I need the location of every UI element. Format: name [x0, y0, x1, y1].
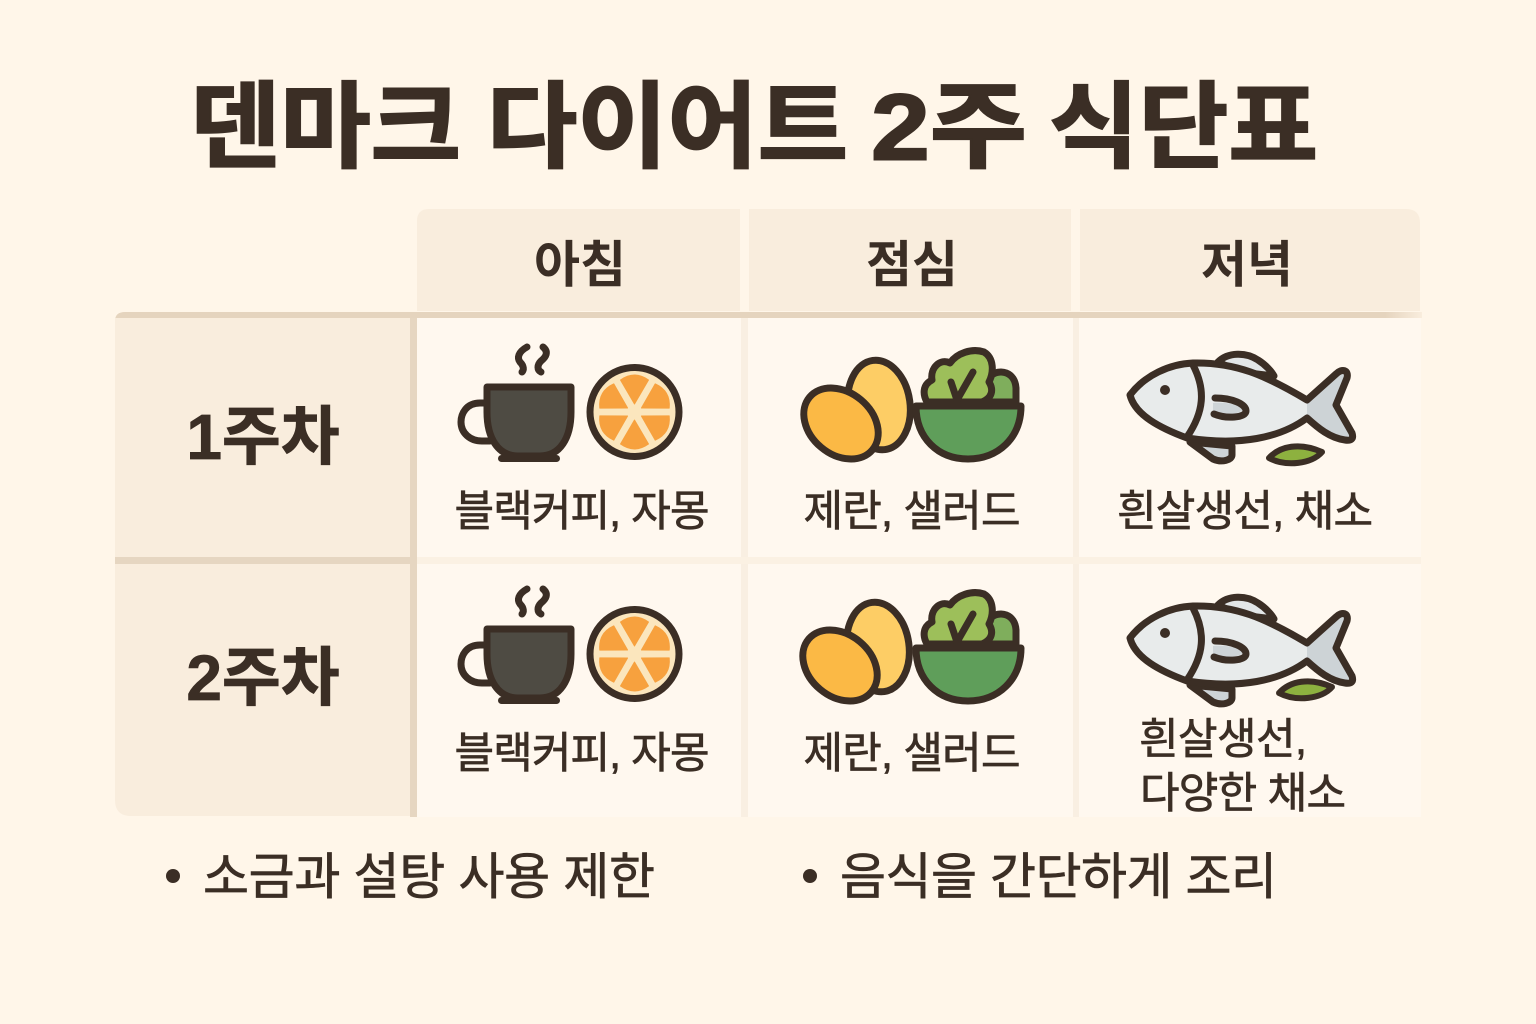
cell: week 2 dinner [1130, 597, 1353, 818]
icon: leaf [1279, 681, 1332, 698]
cell: week 1 breakfast [454, 347, 710, 536]
note: salt and sugar: 소금과 설탕 사용 제한 [203, 849, 655, 905]
title: 2주 [871, 74, 1027, 180]
label: 흰살생선, [1139, 716, 1307, 764]
row header: 1주차 [115, 318, 410, 557]
label: 흰살생선, 채소 [1117, 488, 1373, 536]
title: 덴마크 [190, 74, 461, 180]
icon: eggs [790, 356, 916, 474]
icon: grapefruit [590, 610, 679, 698]
label: 블랙커피, 자몽 [454, 730, 710, 778]
label: 다양한 채소 [1140, 770, 1346, 818]
header: 저녁 [1080, 209, 1420, 311]
title: 식단표 [1049, 74, 1318, 180]
cell: week 2 lunch [789, 593, 1021, 778]
cell: week 2 breakfast [454, 589, 710, 778]
cell: week 1 dinner [1117, 354, 1373, 536]
icon: coffee cup [461, 347, 571, 462]
icon: fish [1130, 597, 1353, 704]
header: 점심: 점심 [866, 237, 958, 293]
row header: 2주차: 2주차 [186, 642, 340, 714]
label: 제란, 샐러드 [804, 730, 1020, 778]
note: simple cooking: 음식을 간단하게 조리 [840, 849, 1277, 905]
title: 다이어트 [487, 74, 848, 180]
header: 저녁: 저녁 [1201, 237, 1293, 293]
icon: coffee cup [461, 589, 571, 704]
icon: salad bowl [916, 351, 1021, 459]
icon: leaf [1269, 446, 1322, 463]
icon: grapefruit [590, 368, 679, 456]
icon: salad bowl [916, 593, 1021, 701]
title [190, 74, 1318, 180]
icon: fish [1130, 354, 1353, 461]
label [1139, 716, 1346, 818]
header: 아침: 아침 [534, 237, 626, 293]
icon: eggs [789, 598, 915, 716]
header: 아침 [417, 209, 740, 311]
row header: 2주차 [115, 564, 410, 816]
label: 블랙커피, 자몽 [454, 488, 710, 536]
label: 제란, 샐러드 [804, 488, 1020, 536]
row header: 1주차: 1주차 [186, 401, 340, 473]
table [115, 209, 1422, 818]
header: 점심 [749, 209, 1071, 311]
cell: week 1 lunch [790, 351, 1021, 536]
